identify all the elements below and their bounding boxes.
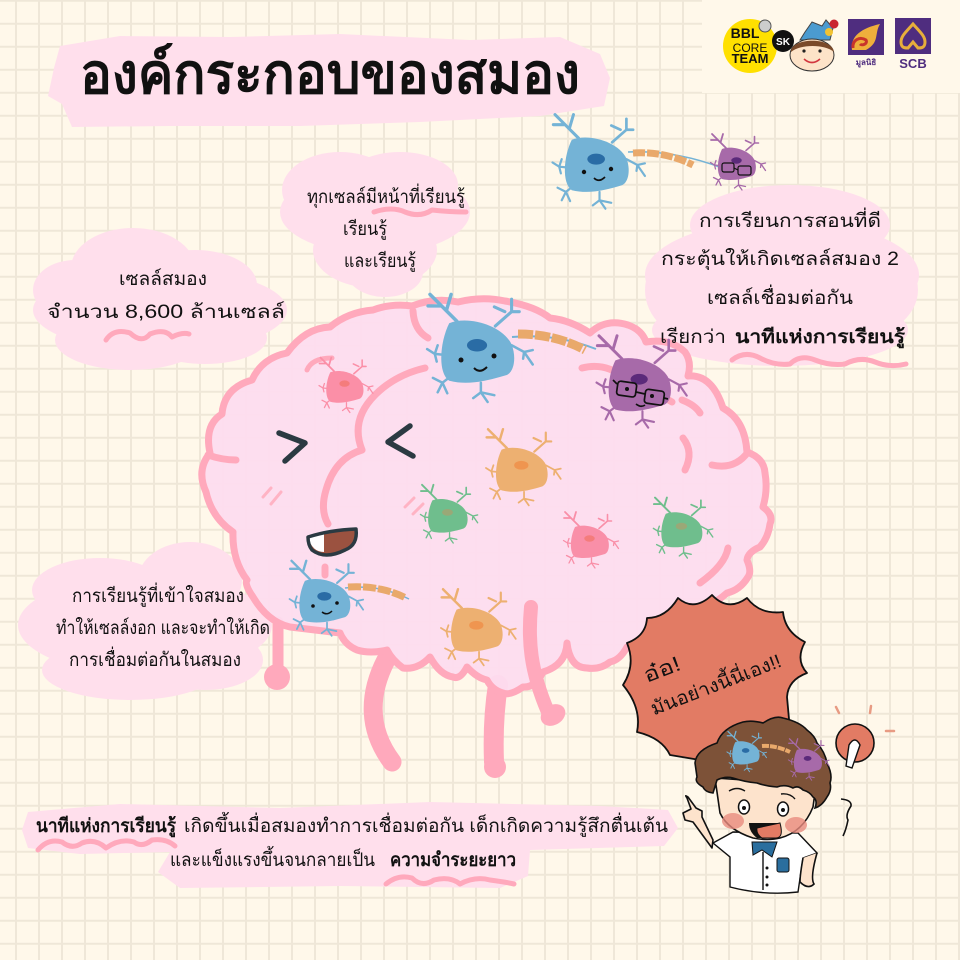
- text: good teaching: เซลล์เชื่อมต่อกัน: [707, 284, 853, 309]
- logo: BBL Core Team: SK: [776, 37, 791, 48]
- neuron: pink: [319, 358, 373, 412]
- text: bottom summary: และแข็งแรงขึ้นจนกลายเป็น: [170, 846, 375, 871]
- logo: Siam Commercial Foundation: มูลนิธิ: [856, 58, 876, 68]
- text: brain-friendly learning: การเรียนรู้ที่เข้าใจสมอง: [72, 582, 244, 607]
- boy hair: [695, 717, 831, 808]
- neuron: orange: [486, 429, 561, 505]
- brain character: [202, 299, 771, 778]
- speech bubble: [623, 595, 807, 760]
- text: brain cell count: จำนวน 8,600 ล้านเซลล์: [47, 301, 285, 323]
- neuron: green right: [653, 498, 713, 558]
- text: good teaching: เรียกว่า: [660, 326, 726, 348]
- brain body: [202, 299, 771, 694]
- logo strip background: [702, 0, 960, 93]
- neuron: orange lower: [441, 589, 516, 665]
- brain face: mouth: [308, 529, 356, 555]
- boy face: [715, 778, 816, 840]
- text: every cell learns: เรียนรู้: [343, 218, 387, 240]
- logo: SCB: [895, 18, 931, 71]
- logo: BBL Core Team: [723, 19, 794, 73]
- logos: [723, 18, 931, 73]
- brain folds: [208, 311, 748, 583]
- text: good teaching: การเรียนการสอนที่ดี: [699, 207, 881, 232]
- logo: BBL Core Team: CORE: [733, 41, 767, 55]
- text: brain cell count: [47, 268, 285, 323]
- underline: long-term memory: [386, 877, 514, 884]
- legs behind brain: [264, 622, 506, 778]
- brain face: blush: [263, 488, 423, 514]
- boy arm and hand: [683, 796, 713, 848]
- text: every cell learns: และเรียนรู้: [344, 250, 416, 272]
- logo: SCB: SCB: [899, 56, 927, 71]
- boy shirt: [713, 832, 817, 893]
- front leg stem: [530, 607, 569, 730]
- panel: brain-friendly learning cloud: [18, 542, 272, 700]
- text: good teaching: กระตุ้นให้เกิดเซลล์สมอง 2: [661, 248, 899, 271]
- boy character: [683, 717, 831, 893]
- title: องค์กระกอบของสมอง: [80, 42, 580, 105]
- text: bottom summary: ความจำระยะยาว: [390, 850, 516, 871]
- logo: BBL Core Team: BBL: [731, 25, 760, 41]
- text: every cell learns: [307, 183, 465, 272]
- text: brain-friendly learning: การเชื่อมต่อกันในสมอง: [69, 646, 241, 671]
- neuron: small blue with axon: [289, 561, 409, 636]
- panel: title background: [48, 34, 610, 127]
- panel: every cell learns cloud: [280, 152, 470, 297]
- bubble text: มันอย่างนี้นี่เอง!!: [647, 647, 785, 720]
- underline: learning moment: [732, 354, 906, 366]
- bubble text: [636, 618, 785, 720]
- text: brain-friendly learning: ทำให้เซลล์งอก และจะทำให้เกิด: [56, 617, 270, 639]
- underline: bottom left: [38, 840, 175, 850]
- text: every cell learns: ทุกเซลล์มีหน้าที่เรียนรู้: [307, 183, 465, 209]
- text: bottom summary: เกิดขึ้นเมื่อสมองทำการเชื่อมต่อกัน เด็กเกิดความรู้สึกตื่นเต้น: [184, 812, 668, 837]
- bubble text: อ๋อ!: [640, 652, 684, 688]
- brain face: eyes: [279, 426, 413, 461]
- text: bottom summary: นาทีแห่งการเรียนรู้: [36, 815, 177, 838]
- panel: bottom summary band: [22, 802, 678, 888]
- logo: BBL Core Team: TEAM: [732, 51, 768, 66]
- idea circle and rays: [836, 706, 894, 836]
- text: good teaching: [660, 207, 906, 349]
- text: bottom summary: [36, 812, 668, 871]
- boy collar and pocket: [752, 842, 777, 857]
- underline: 8,600: [106, 332, 189, 340]
- neurons on hair: [727, 731, 829, 780]
- neuron: main blue connected to purple: [427, 294, 687, 428]
- neuron: red: [564, 512, 618, 568]
- text: brain cell count: เซลล์สมอง: [119, 268, 207, 290]
- neuron: green: [420, 485, 478, 543]
- boy eyes and mouth: [722, 788, 807, 838]
- text: good teaching: นาทีแห่งการเรียนรู้: [735, 326, 906, 349]
- logo: Siam Commercial Foundation: [848, 19, 884, 68]
- underline: learns: [374, 209, 466, 215]
- text: brain-friendly learning: [56, 582, 270, 671]
- panel: good teaching cloud: [645, 185, 919, 366]
- neuron: top pair: [552, 115, 766, 209]
- panel: brain cells count cloud: [33, 228, 287, 370]
- logo: child face: [790, 20, 838, 71]
